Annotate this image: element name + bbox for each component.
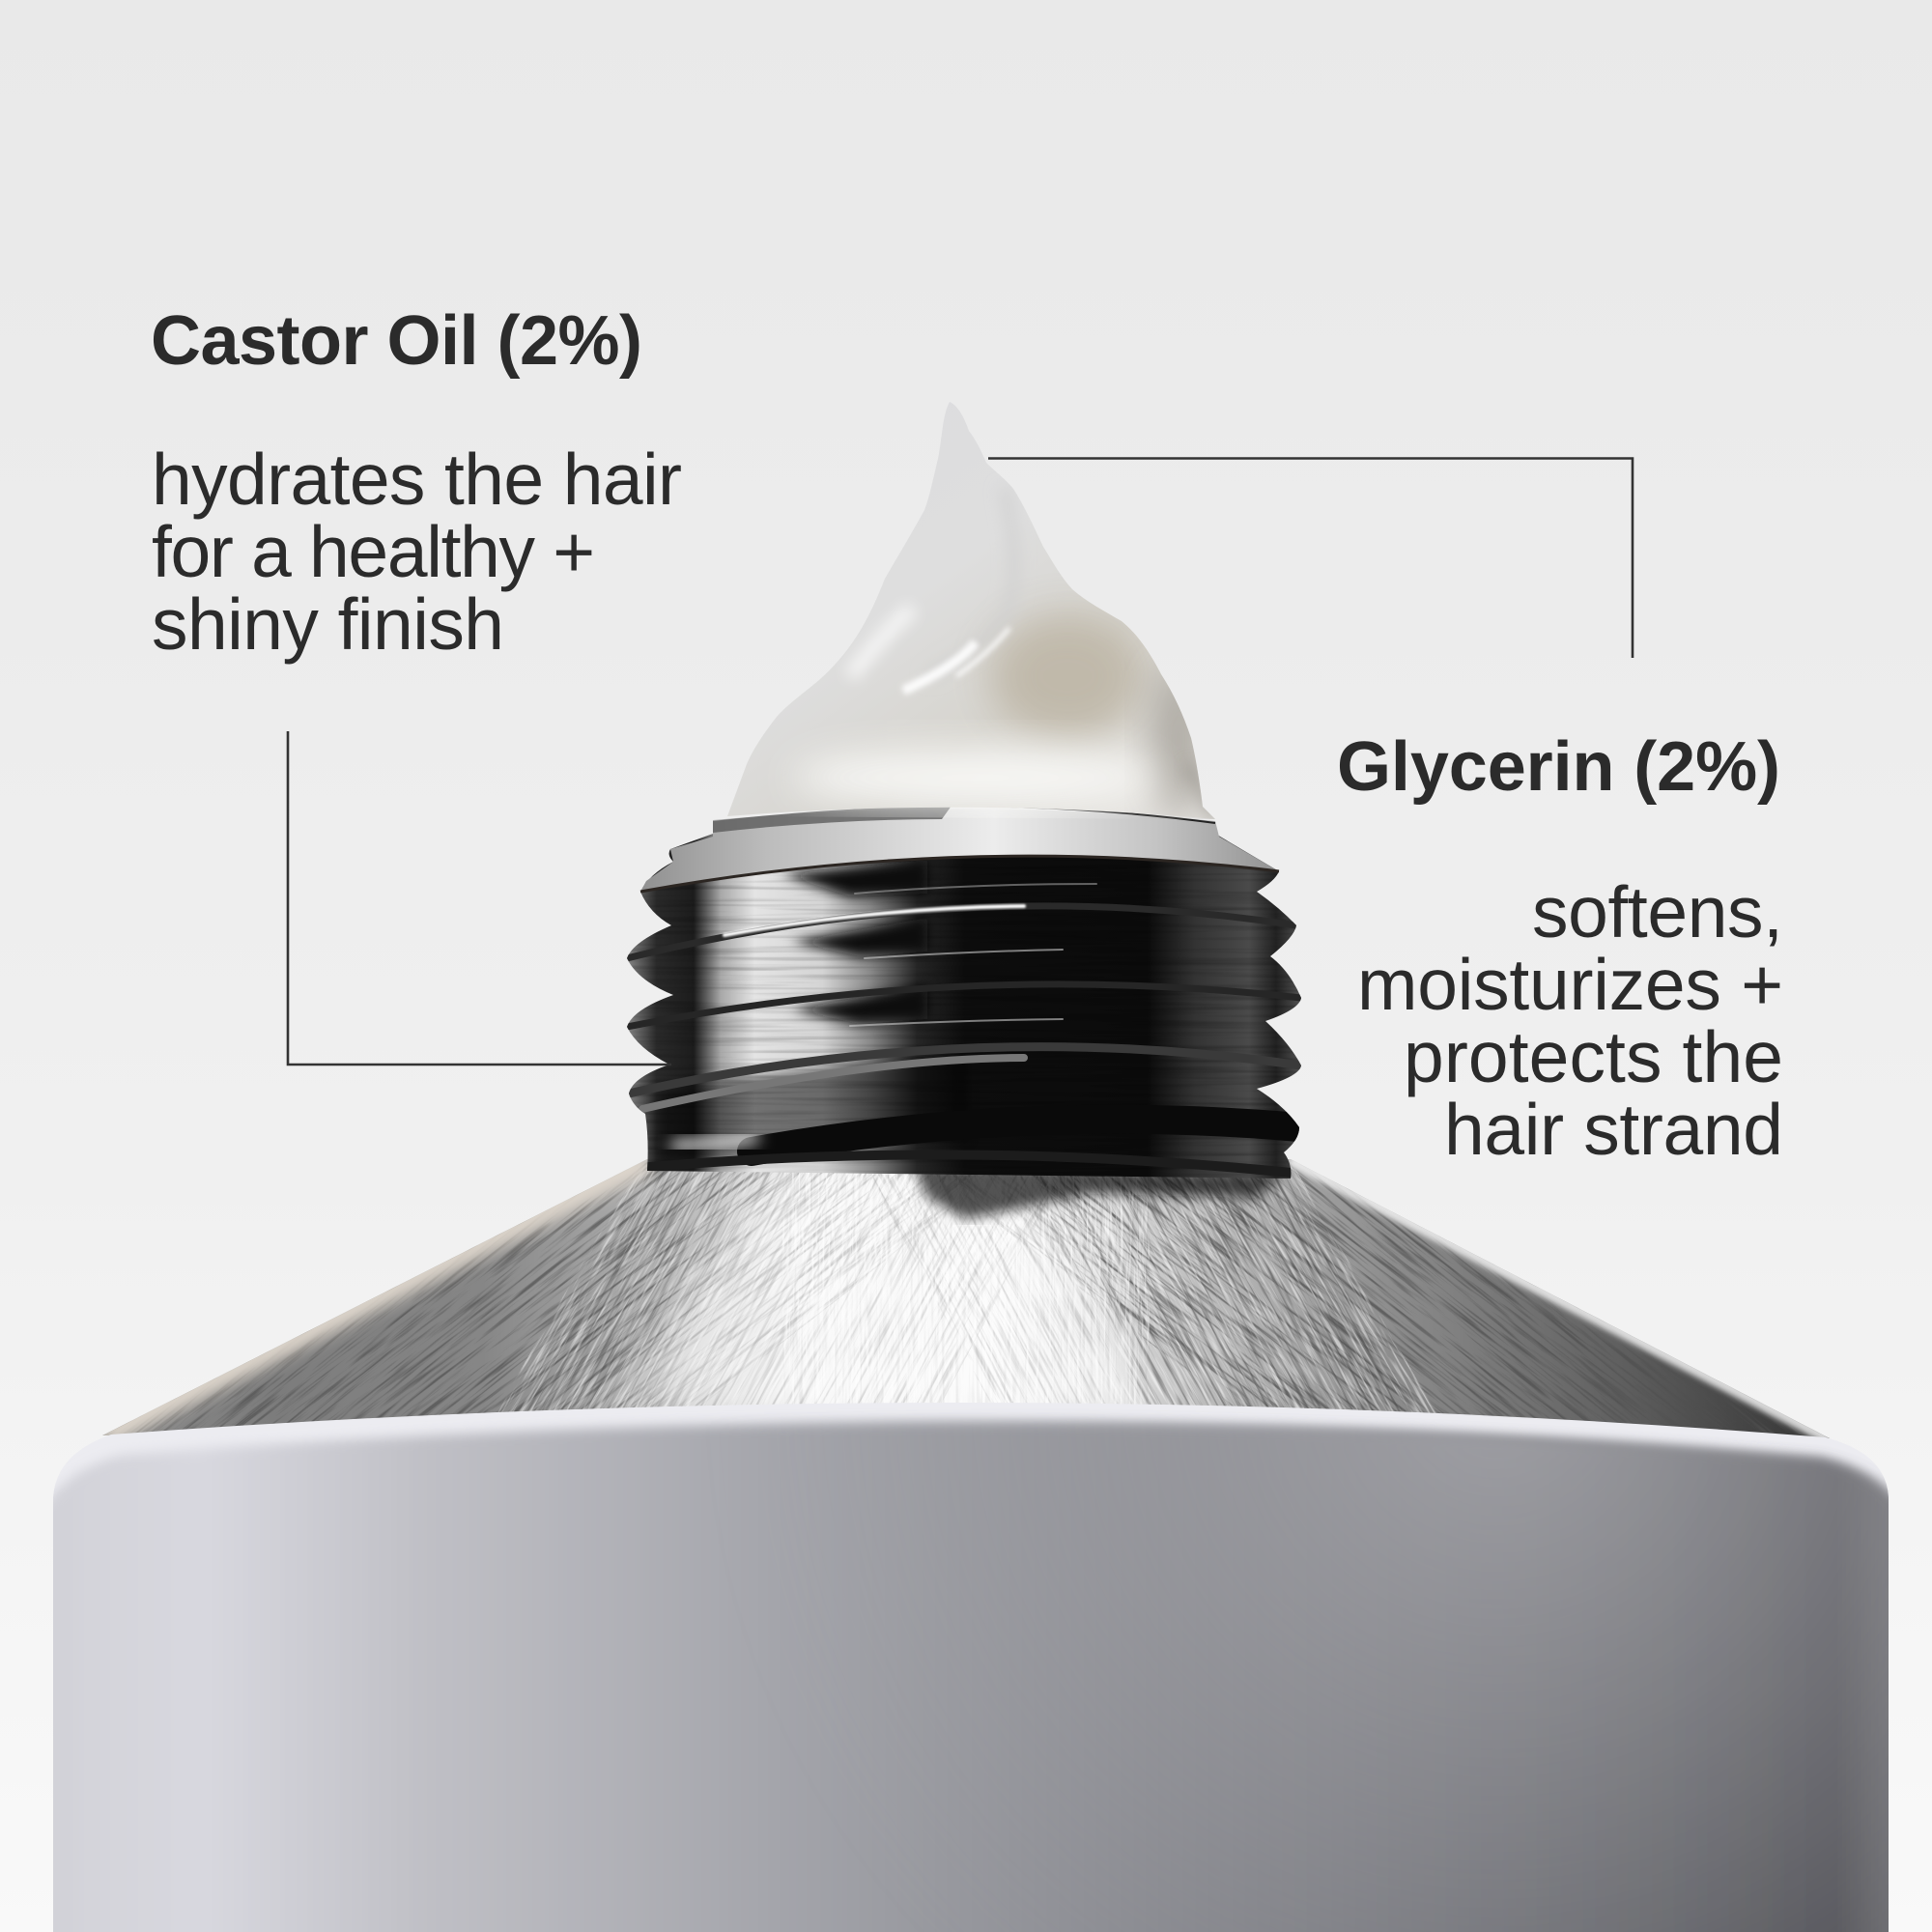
heading: castor oil: Castor Oil (2%) xyxy=(151,302,642,380)
description: glycerin: softens, xyxy=(1532,871,1783,952)
description: castor oil: for a healthy + xyxy=(152,511,595,592)
threaded neck xyxy=(618,831,1314,1179)
metal cone shoulder xyxy=(102,1159,1830,1438)
heading: glycerin: Glycerin (2%) xyxy=(1337,728,1780,806)
cream swirl xyxy=(727,402,1217,821)
leader line: castor oil to thread xyxy=(288,731,671,1065)
callout: glycerin xyxy=(988,458,1783,1170)
description: glycerin: hair strand xyxy=(1444,1089,1783,1170)
callout: castor oil xyxy=(151,302,682,1065)
product: tube with cream xyxy=(39,402,1908,1932)
grey tube body xyxy=(39,1403,1908,1932)
leader line: cream tip to glycerin xyxy=(988,458,1633,658)
description: glycerin: moisturizes + xyxy=(1357,944,1783,1025)
description: glycerin: protects the xyxy=(1404,1016,1783,1097)
description: castor oil: shiny finish xyxy=(152,583,504,665)
silver top ring xyxy=(640,806,1279,892)
description: castor oil: hydrates the hair xyxy=(152,439,682,520)
